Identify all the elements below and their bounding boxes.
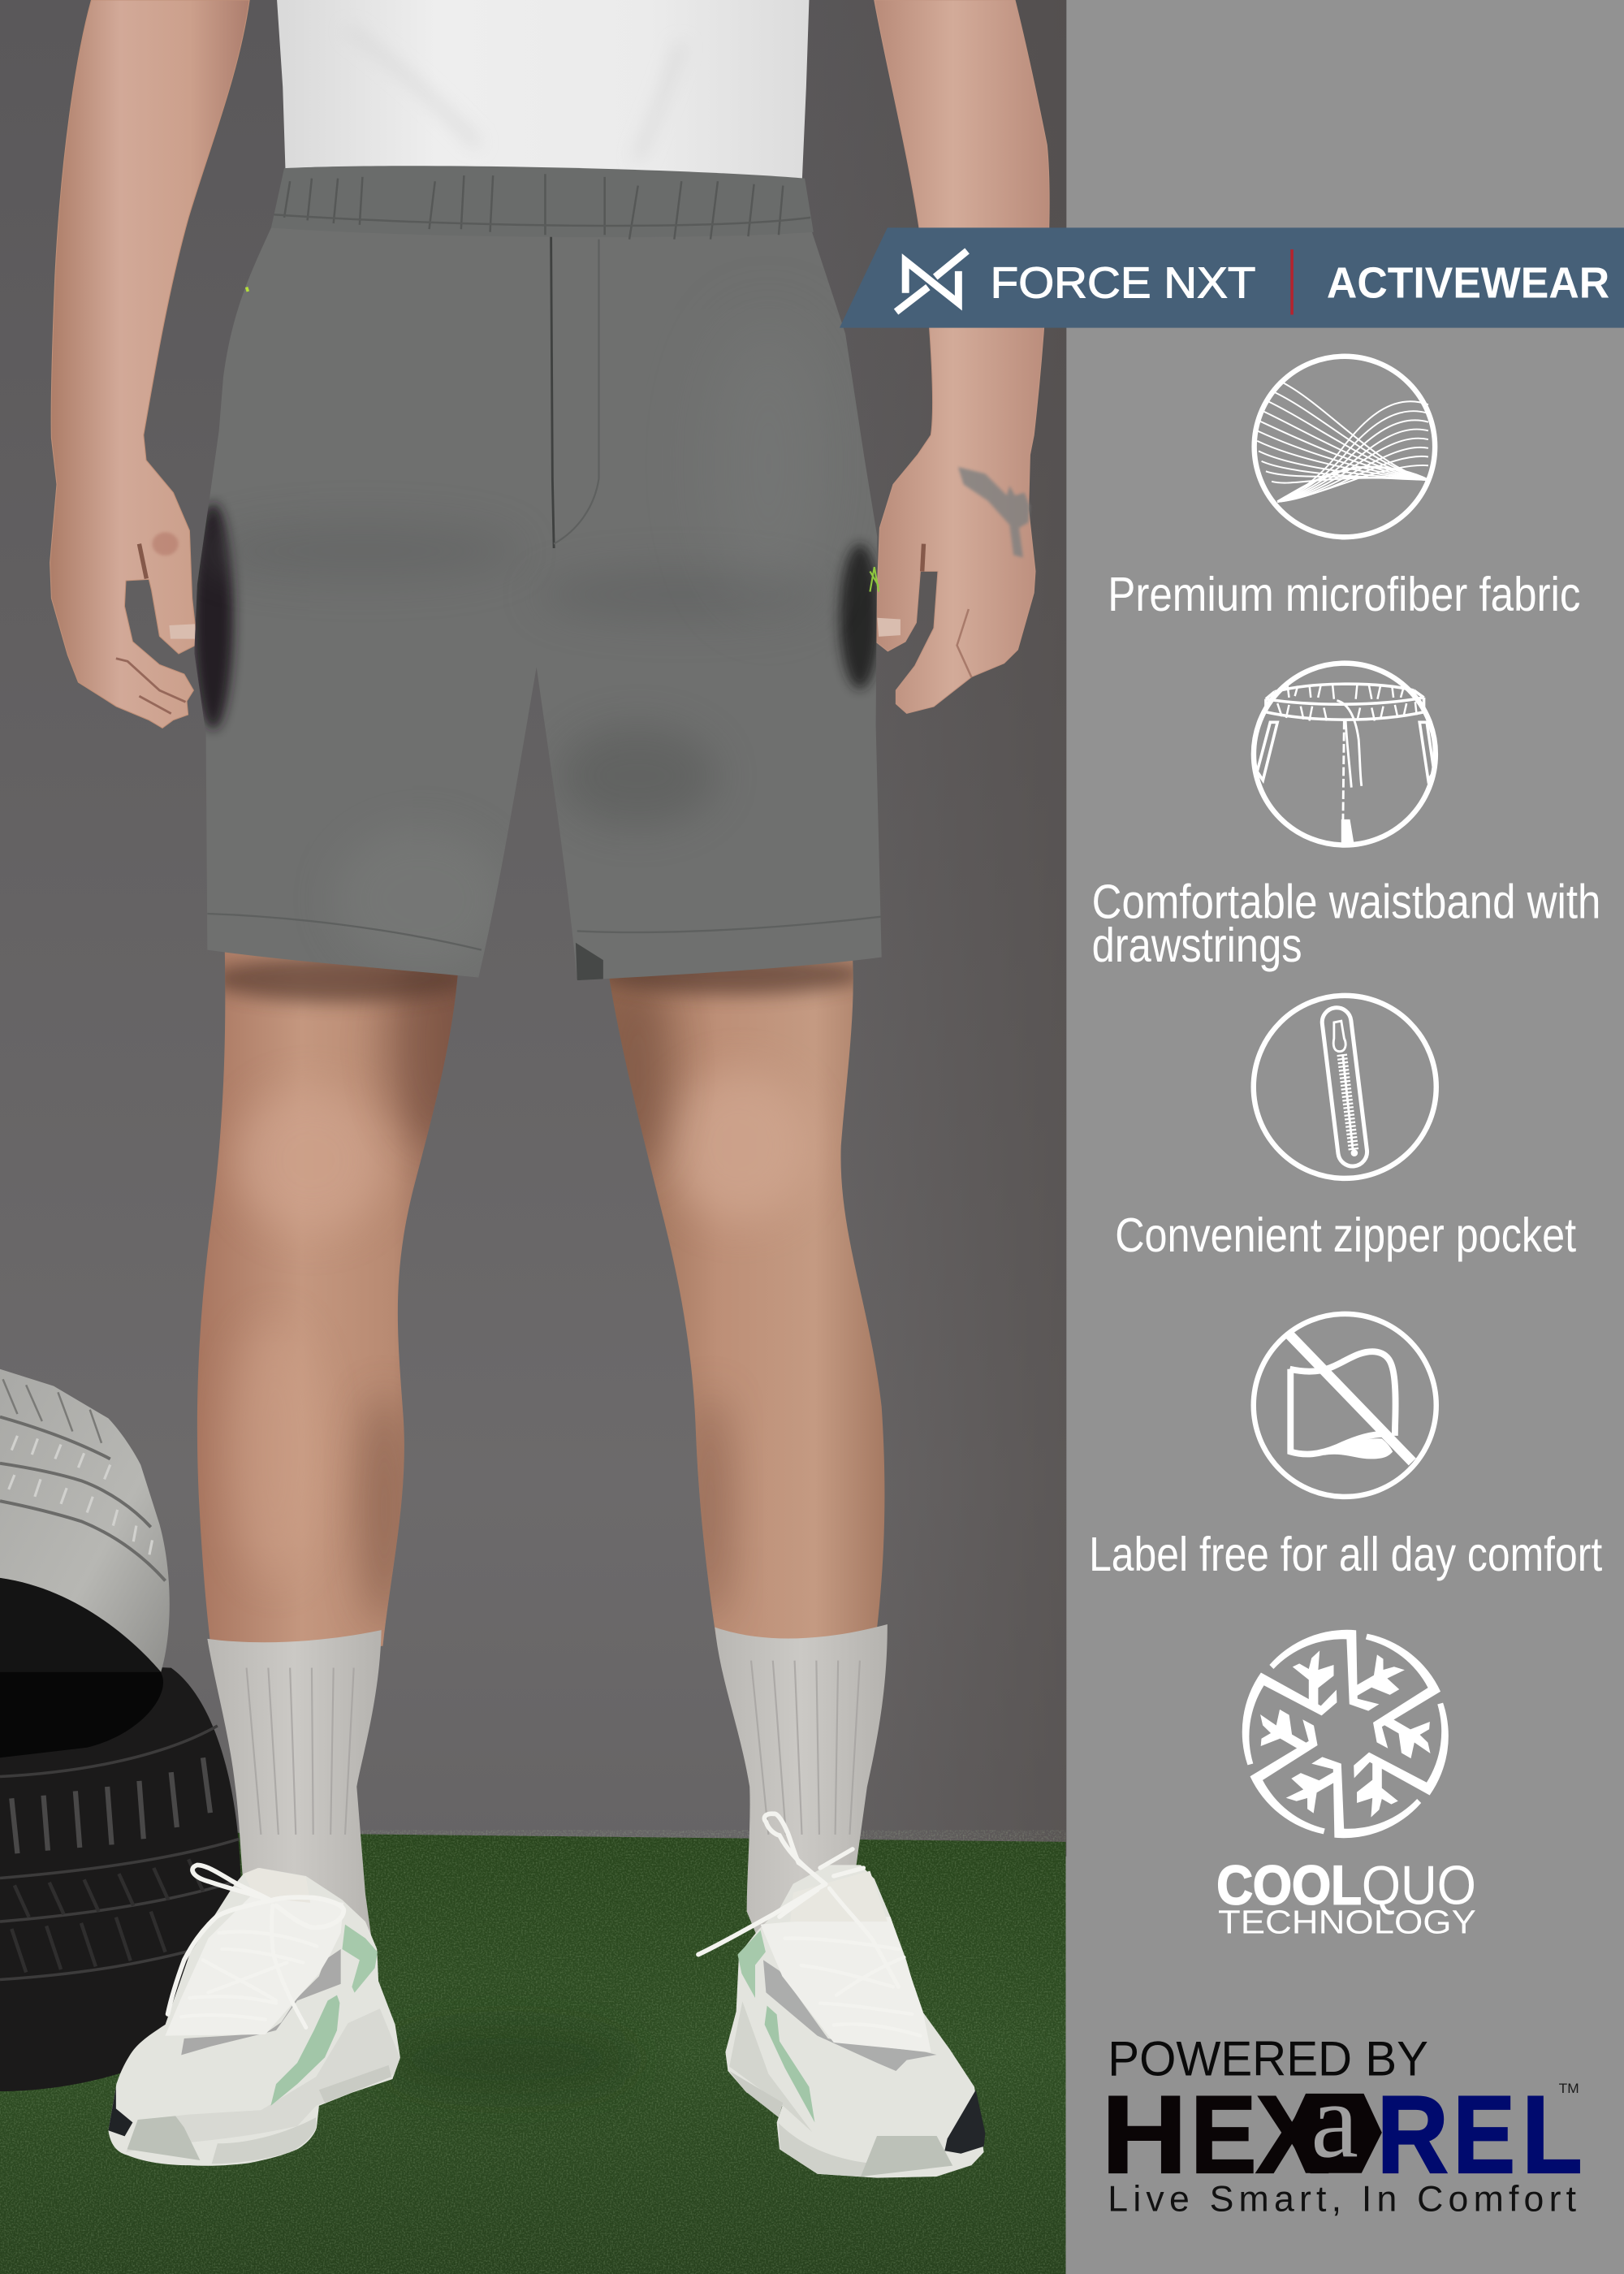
wordmark: COOLQUO: COOLQUO — [1216, 1856, 1476, 1917]
tongue — [244, 1868, 310, 1903]
left sneaker — [108, 1865, 400, 2166]
label: drawstrings: drawstrings — [1092, 919, 1302, 972]
toe cap — [861, 2136, 952, 2177]
logo: hexarel: TM — [1559, 2081, 1579, 2096]
logo: hexarel: X — [1255, 2073, 1328, 2196]
thumb crease — [139, 544, 146, 578]
logo: hexarel: E — [1453, 2073, 1515, 2196]
banner shape — [840, 227, 1624, 328]
logo: hexarel: R — [1377, 2073, 1449, 2196]
silver panel — [763, 1960, 936, 2071]
lace panel — [165, 1892, 343, 2036]
icon: shorts waistband in circle — [1254, 664, 1436, 845]
elastic waistband — [271, 166, 814, 240]
right leg — [602, 954, 884, 1639]
right sock — [715, 1624, 888, 1936]
icon: zipper in circle — [1254, 996, 1436, 1178]
shoe body — [108, 1868, 400, 2166]
black toe accent — [108, 2087, 132, 2136]
grass floor — [0, 1831, 1065, 2274]
icon: snowflake wheel — [1217, 1616, 1474, 1852]
text: powered by: POWERED BY — [1108, 2030, 1428, 2086]
midsole shading — [126, 2008, 400, 2152]
right sneaker — [698, 1814, 985, 2178]
neon logo on leg — [870, 567, 879, 592]
fabric fold shadows — [203, 319, 827, 971]
finger crease — [922, 544, 924, 572]
shadow beneath left hand — [193, 504, 234, 729]
right arm and hand with tattoo — [875, 0, 1049, 713]
text: activewear: ACTIVEWEAR — [1327, 260, 1609, 308]
logo: hexarel: E — [1190, 2073, 1257, 2196]
hem stitching — [207, 914, 882, 950]
feature: premium microfiber fabric — [1108, 357, 1580, 621]
panel: feature column — [1066, 0, 1624, 2274]
icon: woven fibre curves in circle — [1255, 357, 1435, 537]
knuckle tint — [153, 532, 179, 556]
midsole shading — [729, 2001, 812, 2132]
green side panel — [270, 1995, 339, 2106]
left arm and hand — [50, 0, 249, 728]
toe cap — [127, 2116, 200, 2160]
left leg — [197, 952, 458, 1646]
neon pocket mark — [247, 287, 248, 292]
green heel panel — [737, 1930, 766, 1998]
shoe body — [725, 1865, 984, 2178]
grey shorts — [193, 227, 882, 980]
laces — [168, 1865, 343, 2027]
green side panel — [765, 2006, 814, 2122]
laces — [698, 1814, 920, 2036]
black tire — [0, 1661, 240, 2091]
black toe accent — [944, 2090, 985, 2154]
logo: hexarel: H — [1102, 2073, 1187, 2196]
tagline: Live Smart, In Comfort — [1108, 2179, 1577, 2219]
wordmark: TECHNOLOGY: TECHNOLOGY — [1218, 1903, 1476, 1940]
grey panel — [181, 1949, 341, 2055]
white painted tire — [0, 1369, 170, 1672]
heel tongue — [790, 1871, 888, 1922]
logo: hexarel: L — [1522, 2073, 1583, 2196]
logo: hexarel — [1102, 2060, 1583, 2196]
feature: convenient zipper pocket — [1115, 996, 1576, 1262]
feature: waistband with drawstrings — [1092, 664, 1600, 972]
thumbnail — [877, 618, 901, 637]
fly placket — [551, 232, 599, 548]
thumbnail — [169, 624, 197, 639]
banner: force nxt activewear — [840, 227, 1624, 328]
photo: model wearing grey shorts — [0, 0, 1067, 2274]
icon: crossed out garment tag in circle — [1254, 1314, 1436, 1497]
green heel panel — [342, 1925, 378, 1993]
finger crease — [116, 659, 186, 714]
logo: hexarel: a — [1311, 2060, 1358, 2180]
feature: coolquo technology — [1216, 1616, 1476, 1940]
divider — [1290, 249, 1294, 315]
inner rear hem — [576, 943, 603, 980]
feature: label free — [1089, 1314, 1602, 1581]
icon: force nxt logo — [896, 251, 967, 312]
tattoo: bird — [958, 467, 1030, 558]
lace panel — [761, 1917, 931, 2052]
white t-shirt — [277, 0, 809, 186]
left sock — [207, 1630, 382, 1936]
studio backdrop — [0, 0, 1067, 1857]
shadow beneath right hand — [840, 544, 880, 689]
text: force nxt: FORCE NXT — [991, 260, 1255, 308]
brand block: powered by hexarel — [1102, 2030, 1583, 2219]
